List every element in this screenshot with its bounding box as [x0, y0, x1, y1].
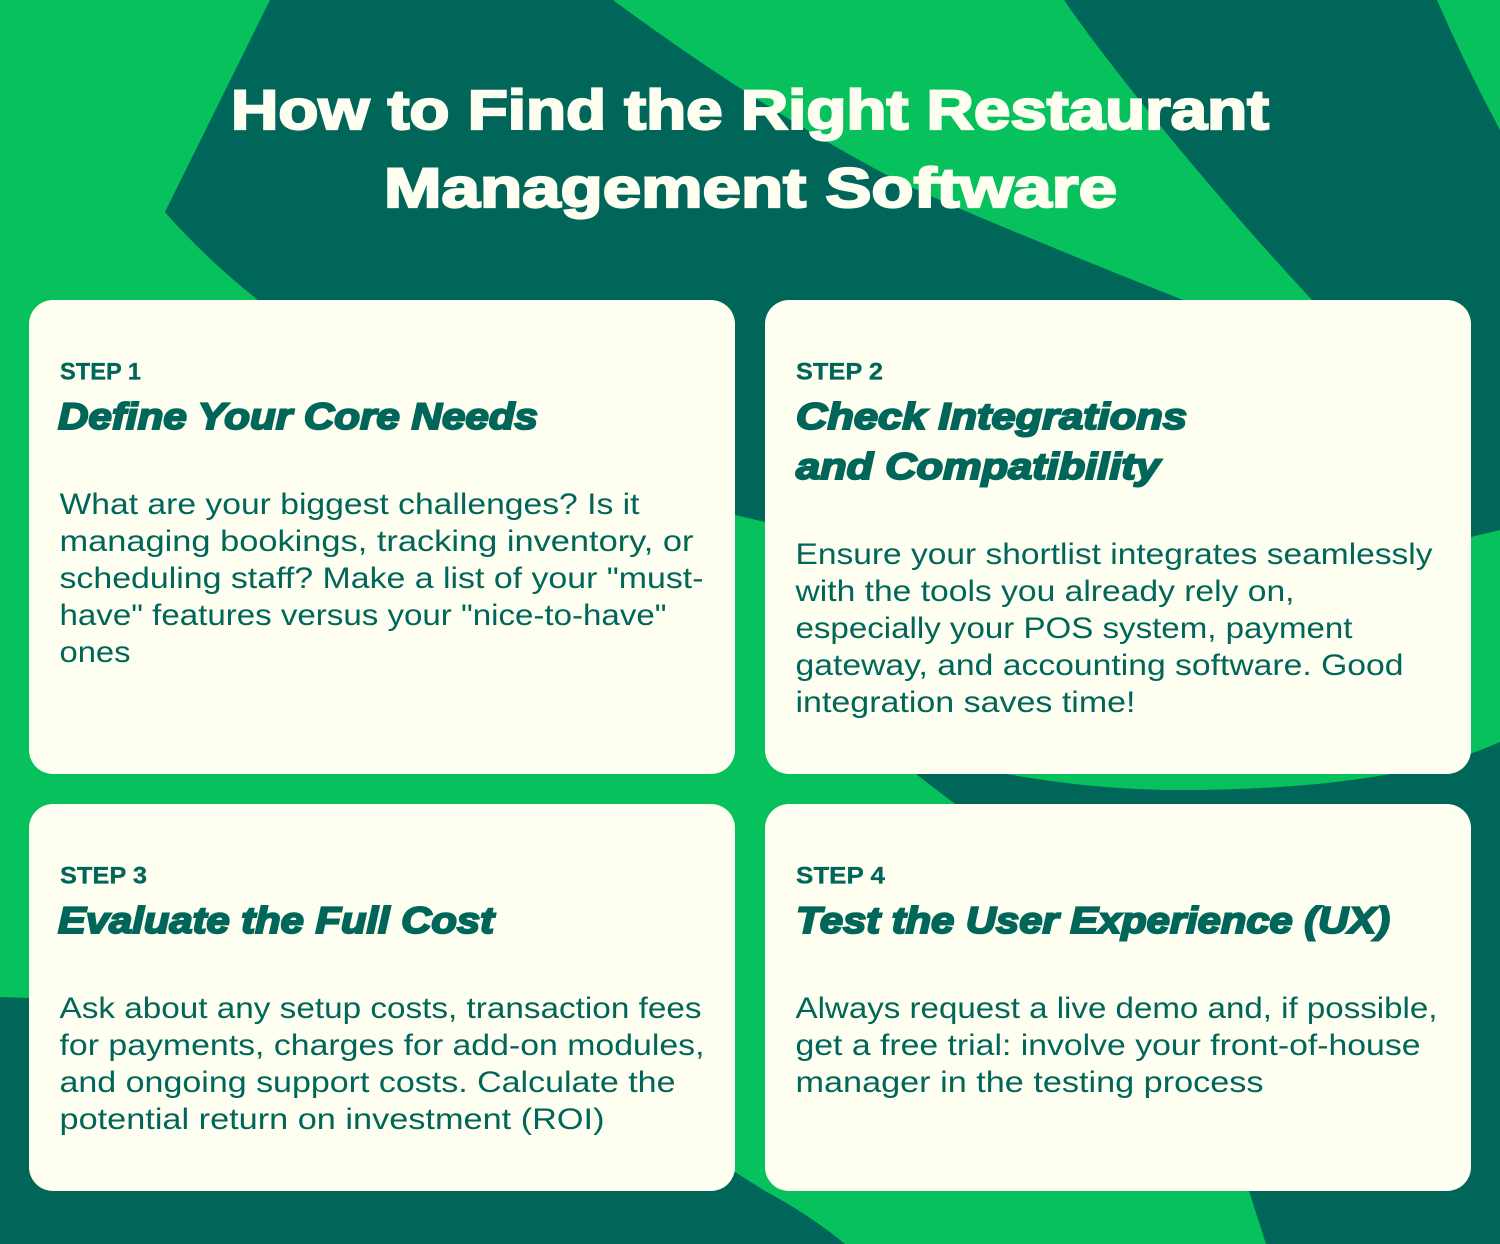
step 2 body: with the tools you already rely on,: [794, 575, 1294, 608]
step 4 body: manager in the testing process: [796, 1066, 1264, 1099]
step 3 body: Ask about any setup costs, transaction fees: [60, 992, 702, 1025]
step 2 body: integration saves time!: [796, 686, 1136, 719]
step 3 heading: Evaluate the Full Cost: [58, 900, 496, 941]
step 4 body: [796, 992, 1438, 1099]
step 2 heading: [796, 396, 1187, 487]
step 3 body: for payments, charges for add-on modules,: [60, 1029, 704, 1062]
step 2 body: Ensure your shortlist integrates seamlessly: [796, 538, 1432, 571]
step 1 label: STEP 1: [60, 358, 141, 386]
step 3 body: and ongoing support costs. Calculate the: [60, 1066, 676, 1099]
step 1 body: What are your biggest challenges? Is it: [60, 488, 640, 521]
panel: step 4: [765, 804, 1471, 1191]
background: dark lower-left shape: [0, 997, 845, 1244]
title: Management Software: [384, 156, 1117, 219]
panel: step 1: [29, 300, 735, 774]
step 3 body: [60, 992, 704, 1136]
background: dark lower-right shape: [916, 742, 1500, 1244]
step 2 body: gateway, and accounting software. Good: [796, 649, 1404, 682]
step 2 heading: and Compatibility: [796, 446, 1163, 487]
step 3 label: STEP 3: [60, 862, 147, 890]
step 2 body: especially your POS system, payment: [796, 612, 1353, 645]
step 1 body: managing bookings, tracking inventory, or: [60, 525, 694, 558]
step 2 heading: Check Integrations: [796, 396, 1187, 437]
step 1 body: scheduling staff? Make a list of your "must-: [60, 562, 704, 595]
background: dark top-left shape: [165, 0, 1183, 522]
step 2 body: [794, 538, 1432, 719]
panel: step 3: [29, 804, 735, 1191]
panel: step 2: [765, 300, 1471, 774]
step 2 label: STEP 2: [796, 358, 883, 386]
step 4 body: Always request a live demo and, if possible,: [796, 992, 1438, 1025]
background: dark top-right shape: [1064, 0, 1500, 537]
step 3 body: potential return on investment (ROI): [60, 1103, 604, 1136]
step 4 label: STEP 4: [796, 862, 886, 890]
step 1 body: [60, 488, 704, 669]
step 1 body: have" features versus your "nice-to-have": [60, 599, 666, 632]
title: [231, 78, 1269, 219]
step 4 body: get a free trial: involve your front-of-house: [796, 1029, 1420, 1062]
step 1 heading: Define Your Core Needs: [58, 396, 538, 437]
step 1 body: ones: [60, 636, 130, 669]
title: How to Find the Right Restaurant: [231, 78, 1269, 141]
step 4 heading: Test the User Experience (UX): [796, 900, 1390, 941]
